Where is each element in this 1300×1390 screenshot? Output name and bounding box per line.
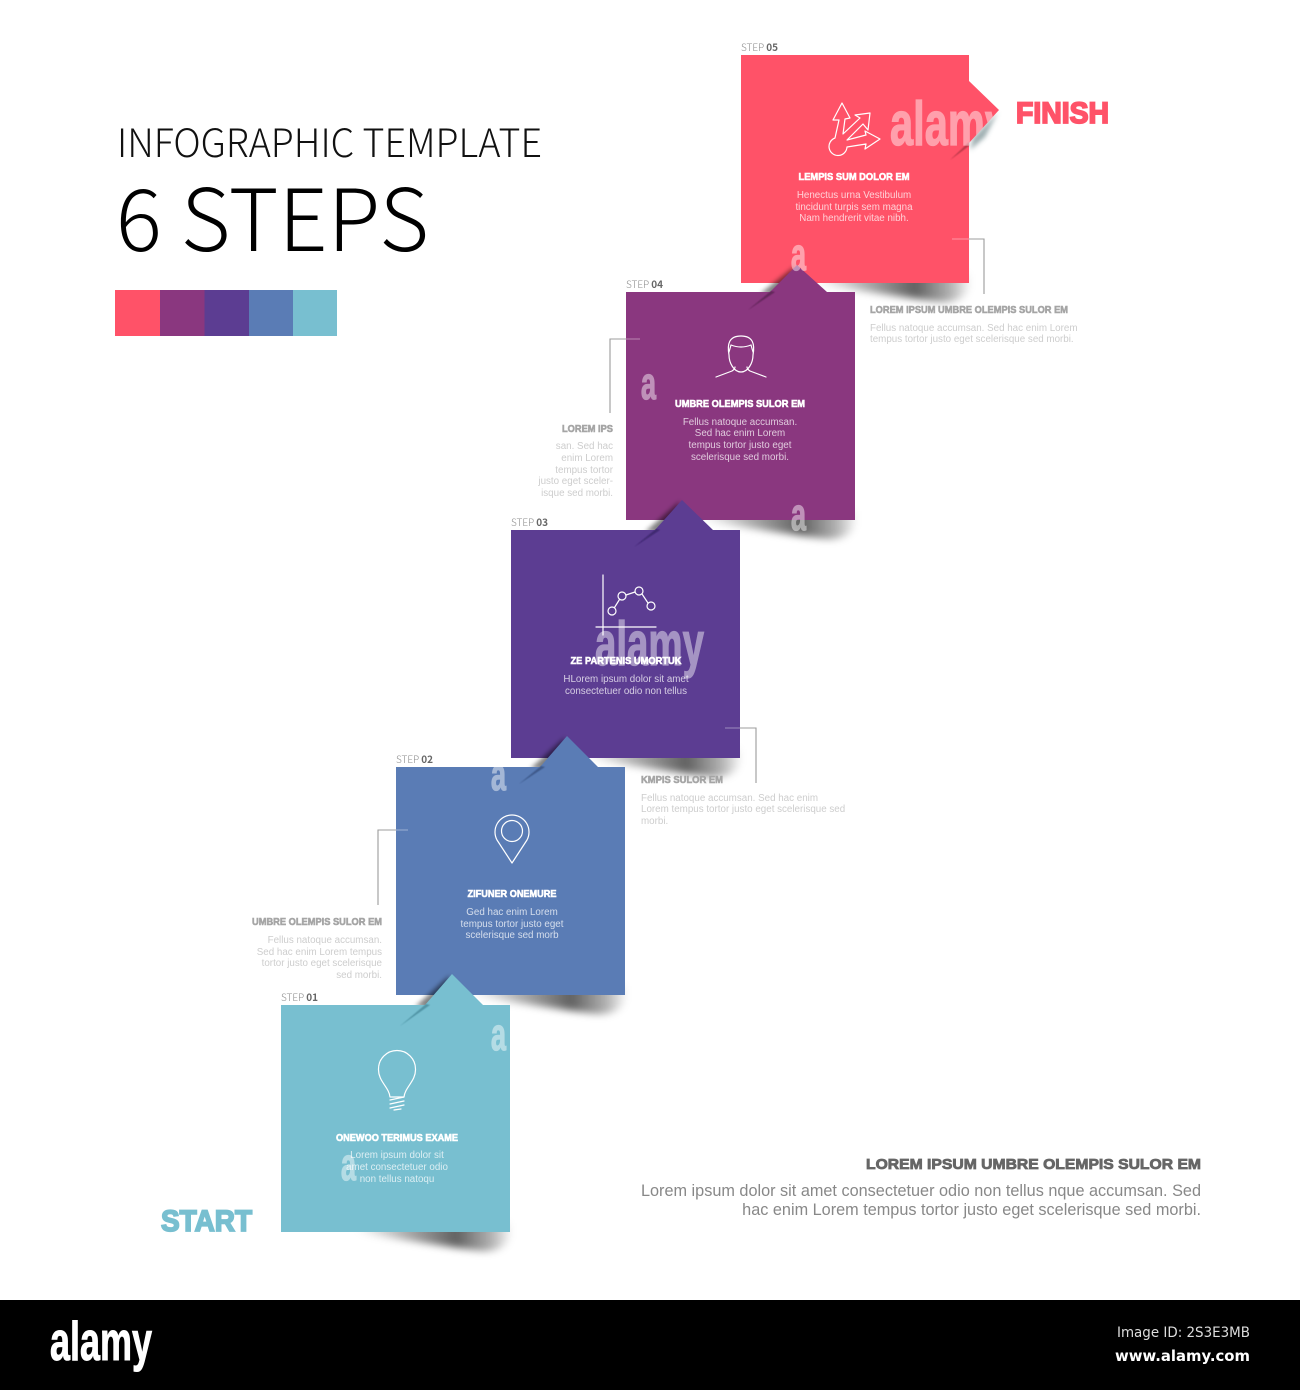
side note: step 2: sed morbi. [336,970,382,981]
side note: step 5: Fellus natoque accumsan. Sed hac enim Lorem [870,323,1077,334]
step 1 panel [281,974,510,1251]
step 1 text [346,1150,448,1185]
summary note: Lorem ipsum dolor sit amet consectetuer odio non tellus nque accumsan. Sed [641,1182,1201,1200]
watermark letters: a [791,489,807,540]
step 2 text: Ged hac enim Lorem [466,907,558,918]
step 1 text: Lorem ipsum dolor sit [350,1150,444,1161]
footer image id: Image ID: 2S3E3MB [1117,1325,1250,1341]
connector: step 5 [969,239,984,294]
step 2 heading: ZIFUNER ONEMURE [468,888,556,900]
step 4 text: scelerisque sed morbi. [691,452,789,463]
side note: step 5: tempus tortor justo eget scelerisque sed morbi. [870,334,1074,345]
step 5 panel [741,39,999,302]
step 1 heading: ONEWOO TERIMUS EXAME [336,1132,458,1144]
watermark on step 3: alamy [595,610,704,679]
watermark letters: a [641,358,657,409]
icon: map pin [495,815,529,863]
side note: step 3: Fellus natoque accumsan. Sed hac enim [641,793,818,804]
watermark letters: a [491,1009,507,1060]
watermark letters: a [791,229,807,280]
step 2 text: tempus tortor justo eget [461,919,564,930]
step 3 text: consectetuer odio non tellus [565,686,687,697]
watermark letters [341,229,807,1190]
side note: step 5: LOREM IPSUM UMBRE OLEMPIS SULOR EM [870,304,1068,316]
side note: step 4: enim Lorem [561,453,613,464]
side note: step 3 [641,774,845,827]
connector: step 4 [610,339,626,413]
footer logo: alamy [50,1310,152,1372]
summary note: hac enim Lorem tempus tortor justo eget scelerisque sed morbi. [742,1201,1201,1219]
side note: step 2: Fellus natoque accumsan. [268,935,382,946]
summary note: LOREM IPSUM UMBRE OLEMPIS SULOR EM [866,1156,1201,1173]
step 1 text: amet consectetuer odio [346,1162,448,1173]
step 4 text: Fellus natoque accumsan. [683,417,797,428]
side note: step 4: tempus tortor [555,465,614,476]
step 4 text [683,417,797,463]
step 2 panel [396,736,625,1014]
step 1 label: STEP 01 [281,989,318,1004]
start label: START [161,1205,252,1238]
watermark on step 5: alamy [890,90,1008,159]
step 4 heading: UMBRE OLEMPIS SULOR EM [675,398,805,410]
step 5 text: tincidunt turpis sem magna [795,202,913,213]
step 5 label: STEP 05 [741,39,778,54]
side note: step 2: tortor justo eget scelerisque [262,958,383,969]
side note: step 3: morbi. [641,816,668,827]
step 2 text [461,907,564,941]
step 5 text [795,190,913,224]
title: INFOGRAPHIC TEMPLATE [117,113,542,169]
side note: step 2 [252,916,383,981]
step 5 text: Nam hendrerit vitae nibh. [799,213,909,224]
step 5 heading: LEMPIS SUM DOLOR EM [798,171,910,183]
side note: step 4 [537,423,614,499]
side note: step 4: LOREM IPS [562,423,613,435]
icon: light bulb [378,1050,416,1110]
watermark letters: a [491,749,507,800]
footer bar [0,1300,1300,1390]
step 3 heading: ZE PARTENIS UMORTUK [570,655,682,667]
summary note [641,1156,1201,1219]
step 4 label: STEP 04 [626,276,663,291]
step 4 text: tempus tortor justo eget [689,440,792,451]
icon: diverging arrows [829,103,880,155]
step 2 text: scelerisque sed morb [465,930,559,941]
side note: step 3: KMPIS SULOR EM [641,774,723,786]
watermark letters: a [341,1139,357,1190]
connector: step 4 inner [626,338,640,340]
side note: step 2: Sed hac enim Lorem tempus [257,947,382,958]
footer url: www.alamy.com [1115,1347,1250,1365]
side note: step 3: Lorem tempus tortor justo eget scelerisque sed [641,804,845,815]
title [116,113,542,276]
finish label: FINISH [1016,97,1109,130]
step 3 panel [511,500,740,777]
step 4 panel [626,265,855,539]
connector: step 2 [378,830,396,905]
icon: person [716,336,766,377]
step 3 text: HLorem ipsum dolor sit amet [563,674,689,685]
connector: step 3 inner [725,727,740,729]
step 4 text: Sed hac enim Lorem [695,428,785,439]
title: 6 STEPS [116,151,429,276]
step 3 text [563,674,689,697]
side note: step 4: justo eget sceler- [537,476,613,487]
icon: line chart [596,575,656,635]
side note: step 4: isque sed morbi. [541,488,613,499]
step 3 label: STEP 03 [511,514,548,529]
step 1 text: non tellus natoqu [360,1174,434,1185]
step 2 label: STEP 02 [396,751,433,766]
colour swatches [115,290,337,336]
side note: step 5 [870,304,1077,345]
side note: step 4: san. Sed hac [556,441,613,452]
side note: step 2: UMBRE OLEMPIS SULOR EM [252,916,382,928]
connector: step 3 [740,728,756,783]
connector: step 5 inner [952,238,969,240]
step 5 text: Henectus urna Vestibulum [797,190,911,201]
connector: step 2 inner [396,829,408,831]
